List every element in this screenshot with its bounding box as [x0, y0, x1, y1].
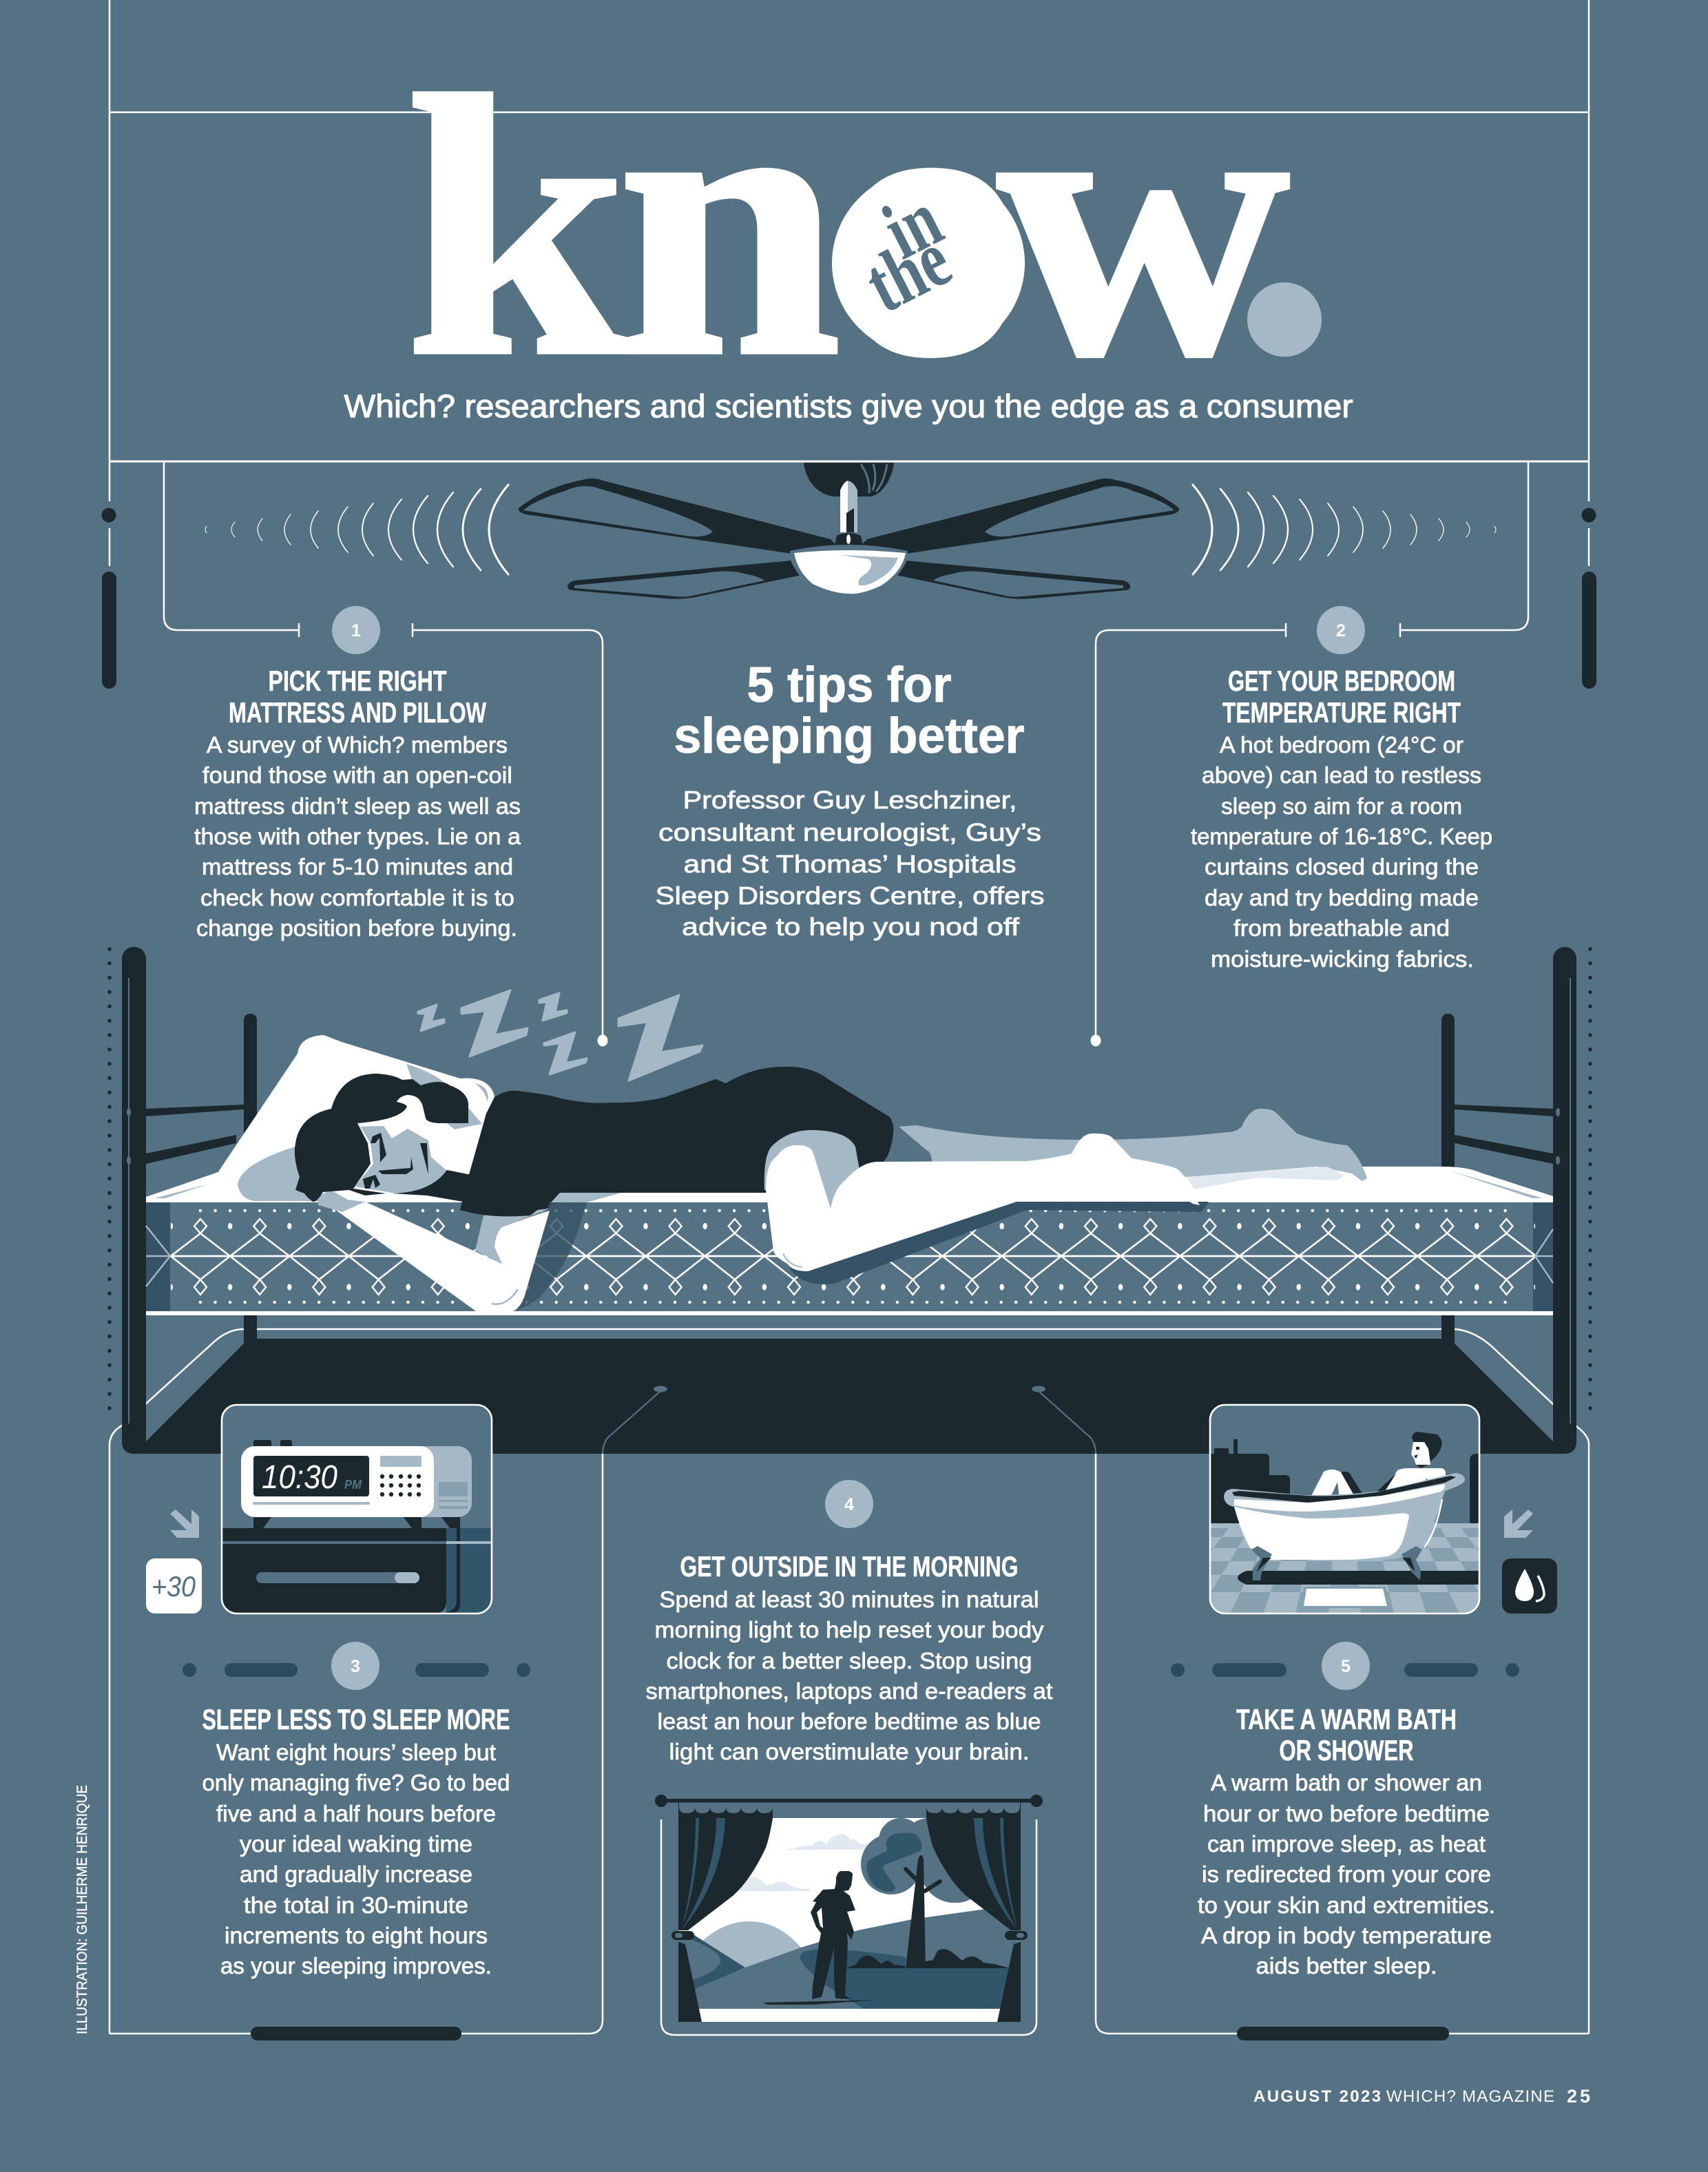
clock legs: [253, 1517, 460, 1528]
tip 3 text: Want eight hours’ sleep but: [216, 1740, 496, 1765]
alarm buttons: [253, 1440, 292, 1446]
arm: [317, 1197, 550, 1311]
tip 4 text: GET OUTSIDE IN THE MORNING: [680, 1550, 1018, 1583]
tip 2 text: from breathable and: [1233, 915, 1450, 941]
panel: bath: [1209, 1403, 1481, 1614]
tip 5 text: OR SHOWER: [1280, 1734, 1413, 1766]
tip 1 text: MATTRESS AND PILLOW: [229, 696, 486, 729]
tip 2 text: TEMPERATURE RIGHT: [1222, 696, 1461, 729]
man silhouette: [763, 1871, 877, 2005]
tip 1 text: check how comfortable it is to: [200, 885, 514, 910]
tip 2 text: day and try bedding made: [1205, 885, 1479, 910]
in the: the: [852, 214, 964, 330]
tip 2 text: GET YOUR BEDROOM: [1228, 665, 1455, 697]
man neck shade: [1416, 1465, 1428, 1468]
tip 3 text: only managing five? Go to bed: [202, 1770, 510, 1795]
arrow right: [1504, 1510, 1533, 1538]
display: [253, 1456, 369, 1496]
inner posts and rails: [146, 1014, 1553, 1344]
centre heading block: and St Thomas’ Hospitals: [683, 850, 1017, 878]
blade lower right: [896, 561, 1130, 599]
full stop: [1247, 282, 1322, 357]
blade upper right: [849, 479, 1179, 558]
panel: window scene: [655, 1795, 1043, 2035]
clock body: [241, 1446, 434, 1517]
in the: in: [870, 174, 955, 276]
tub panel: [1234, 1507, 1409, 1560]
rear details: [439, 1482, 468, 1509]
tip 4 text: light can overstimulate your brain.: [669, 1739, 1029, 1764]
nightstand: [222, 1528, 446, 1614]
letter o disc: [832, 169, 1025, 357]
ceiling mount: [804, 463, 894, 497]
centre heading block: consultant neurologist, Guy’s: [658, 818, 1041, 846]
footer: [1253, 2086, 1590, 2107]
torso: [460, 1067, 893, 1216]
pm: PM: [344, 1478, 362, 1492]
sheet: [146, 1167, 1553, 1202]
tip 3 text: as your sleeping improves.: [220, 1953, 492, 1978]
tip 4 text: morning light to help reset your body: [654, 1617, 1044, 1642]
tip 2 text: sleep so aim for a room: [1221, 793, 1462, 819]
main hill: [678, 1904, 1021, 2009]
bed: [122, 947, 1576, 1454]
centre heading block: sleeping better: [674, 709, 1025, 764]
furniture left: [1210, 1439, 1290, 1523]
pillow: [210, 1035, 495, 1202]
man far leg: [1341, 1472, 1364, 1498]
furniture right: [1470, 1454, 1479, 1523]
man leg: [1309, 1470, 1355, 1500]
elbow crease: [492, 1289, 518, 1304]
tip 1 text: PICK THE RIGHT: [269, 665, 447, 697]
badge 5 with pills: [1171, 1642, 1519, 1690]
tip 5 text: to your skin and extremities.: [1198, 1892, 1495, 1918]
badge 3 with pills: 3: [351, 1657, 360, 1676]
tip 2 text: temperature of 16-18°C. Keep: [1191, 824, 1492, 849]
letters k n o w: [405, 8, 1290, 436]
tip 1 text: those with other types. Lie on a: [194, 824, 521, 849]
centre heading block: Professor Guy Leschziner,: [683, 786, 1017, 814]
man eye and mouth: [1414, 1447, 1419, 1459]
tip 4 text: smartphones, laptops and e-readers at: [646, 1678, 1052, 1704]
letters k n o w: o: [835, 9, 1028, 436]
floor: [1210, 1523, 1479, 1614]
tip 4 text: [646, 1550, 1052, 1764]
tip 5 text: A drop in body temperature: [1201, 1923, 1492, 1948]
clock button: [380, 1456, 421, 1467]
front leg: [766, 1134, 1200, 1271]
footer: 25: [1567, 2086, 1590, 2107]
table gap: [222, 1541, 492, 1544]
drawer handle: [256, 1572, 419, 1583]
tip 2 text: A hot bedroom (24°C or: [1220, 732, 1464, 758]
badge 1: [332, 606, 380, 654]
lake: [800, 1950, 1010, 2009]
hip: [764, 1130, 860, 1209]
bushes: [847, 1949, 1010, 1968]
tub edge: [1424, 1499, 1442, 1547]
rod: [833, 481, 864, 551]
bath mat: [1300, 1587, 1391, 1608]
outer posts: [122, 947, 1576, 1454]
arrow left: [170, 1510, 199, 1538]
bottom pills: [251, 2027, 1449, 2040]
floor tiles: [1211, 1528, 1479, 1613]
shirt sleeve: [460, 1114, 560, 1216]
tip 5 text: [1198, 1703, 1495, 1978]
illustration credit: ILLUSTRATION: GUILHERME HENRIQUE: [74, 1785, 90, 2034]
icon: wind arcs left: [205, 485, 508, 574]
z letters: [418, 990, 702, 1080]
icon: wind arcs right: [1193, 485, 1496, 574]
icon: ceiling fan: [519, 463, 1179, 599]
sleeping person: [210, 990, 1367, 1311]
tip 2 text: [1191, 665, 1492, 972]
centre heading block: [656, 658, 1044, 941]
tip 3 text: [202, 1703, 510, 1978]
tip 1 text: [194, 665, 521, 941]
tub rim: [1224, 1473, 1465, 1560]
letters k n o w: w: [997, 9, 1290, 436]
badge 3 with pills: [183, 1642, 530, 1690]
tip 3 text: SLEEP LESS TO SLEEP MORE: [202, 1703, 510, 1735]
speaker dots: [380, 1474, 421, 1496]
blade upper left: [519, 479, 848, 558]
tip 2 text: above) can lead to restless: [1202, 762, 1481, 788]
panel: alarm clock: [222, 1405, 492, 1614]
hand: [317, 1190, 365, 1212]
claw feet: [1251, 1546, 1422, 1580]
tip 3 text: and gradually increase: [240, 1861, 472, 1887]
badge 2: [1317, 606, 1365, 654]
man torso: [1383, 1468, 1446, 1494]
badge 4: [825, 1480, 873, 1528]
tub interior: [1232, 1476, 1456, 1503]
tip 4 text: least an hour before bedtime as blue: [657, 1709, 1041, 1734]
tip 5 text: can improve sleep, as heat: [1207, 1831, 1486, 1857]
tree: [906, 1855, 940, 1968]
tip 5 text: is redirected from your core: [1202, 1861, 1491, 1887]
tip 4 text: Spend at least 30 minutes in natural: [660, 1587, 1039, 1612]
tip 1 text: found those with an open-coil: [202, 762, 512, 788]
tip 5 text: A warm bath or shower an: [1211, 1770, 1482, 1795]
knee crease: [783, 1253, 802, 1267]
floor shadow: [1238, 1571, 1479, 1585]
tip 5 text: hour or two before bedtime: [1203, 1801, 1490, 1826]
water drop badge: [1502, 1558, 1557, 1614]
shadow under elbow: [513, 1202, 587, 1311]
clouds: [733, 1834, 875, 1891]
face features: [363, 1133, 428, 1189]
face: [355, 1126, 447, 1193]
sheet shadow: [551, 1193, 621, 1202]
mattress: [146, 1202, 1553, 1315]
centre heading block: 5 tips for: [747, 658, 952, 713]
letters k n o w: n: [617, 8, 841, 435]
centre heading block: Sleep Disorders Centre, offers: [656, 881, 1044, 910]
neck: [408, 1119, 460, 1171]
tip 2 text: curtains closed during the: [1205, 854, 1479, 879]
back leg highlight: [1187, 1167, 1344, 1189]
tip 1 text: mattress didn’t sleep as well as: [194, 793, 521, 819]
+30 badge: [146, 1558, 202, 1614]
badge 1: 1: [351, 621, 361, 640]
arm underside: [475, 1209, 550, 1264]
hair: [295, 1074, 468, 1202]
badge 4: 4: [844, 1495, 854, 1514]
clock rear: [420, 1446, 472, 1517]
man arm shade: [1375, 1474, 1428, 1494]
letters k n o w: k: [405, 20, 632, 432]
time: 10:30: [262, 1459, 337, 1496]
subtitle: Which? researchers and scientists give you the edge as a consumer: [344, 388, 1353, 424]
display underline: [253, 1502, 370, 1505]
tip 3 text: your ideal waking time: [240, 1831, 472, 1857]
title: know in the know: [405, 8, 1322, 436]
base connector dots: [603, 1386, 1096, 1454]
tip 5 text: aids better sleep.: [1256, 1953, 1437, 1978]
badge 5 with pills: 5: [1341, 1657, 1351, 1676]
blade lower left: [567, 561, 802, 599]
man face: [1411, 1442, 1430, 1465]
tip 4 text: clock for a better sleep. Stop using: [667, 1648, 1032, 1673]
curtain right: [926, 1802, 1028, 2022]
tip 3 text: the total in 30-minute: [244, 1892, 468, 1918]
lamp: [790, 545, 908, 598]
tub highlight band: [1234, 1484, 1445, 1512]
foliage: [861, 1818, 987, 1903]
+30 badge: +30: [152, 1570, 196, 1602]
tip 1 text: change position before buying.: [196, 915, 517, 941]
curtain left: [671, 1802, 773, 2022]
man hair: [1412, 1432, 1442, 1461]
curtain rod: [655, 1795, 1043, 1807]
tip 3 text: five and a half hours before: [216, 1801, 496, 1826]
badge 2: 2: [1336, 621, 1346, 640]
tip 1 text: mattress for 5-10 minutes and: [202, 854, 513, 879]
distant hill: [700, 1921, 801, 1967]
footer: WHICH? MAGAZINE: [1386, 2087, 1554, 2106]
leg shadow: [787, 1202, 1209, 1284]
tip 1 text: A survey of Which? members: [207, 732, 508, 758]
tip 2 text: moisture-wicking fabrics.: [1211, 946, 1474, 972]
tip 5 text: TAKE A WARM BATH: [1236, 1703, 1457, 1735]
sky: [678, 1818, 1021, 2022]
centre heading block: advice to help you nod off: [682, 912, 1020, 941]
left hill: [678, 1932, 745, 2001]
legs: back leg: [899, 1109, 1367, 1181]
tip 3 text: increments to eight hours: [225, 1923, 488, 1948]
footer: AUGUST 2023: [1253, 2087, 1381, 2106]
sliver: [445, 1528, 460, 1613]
nightstand shadow: [446, 1528, 492, 1614]
collar: [392, 1170, 471, 1202]
base: [122, 1339, 1576, 1454]
